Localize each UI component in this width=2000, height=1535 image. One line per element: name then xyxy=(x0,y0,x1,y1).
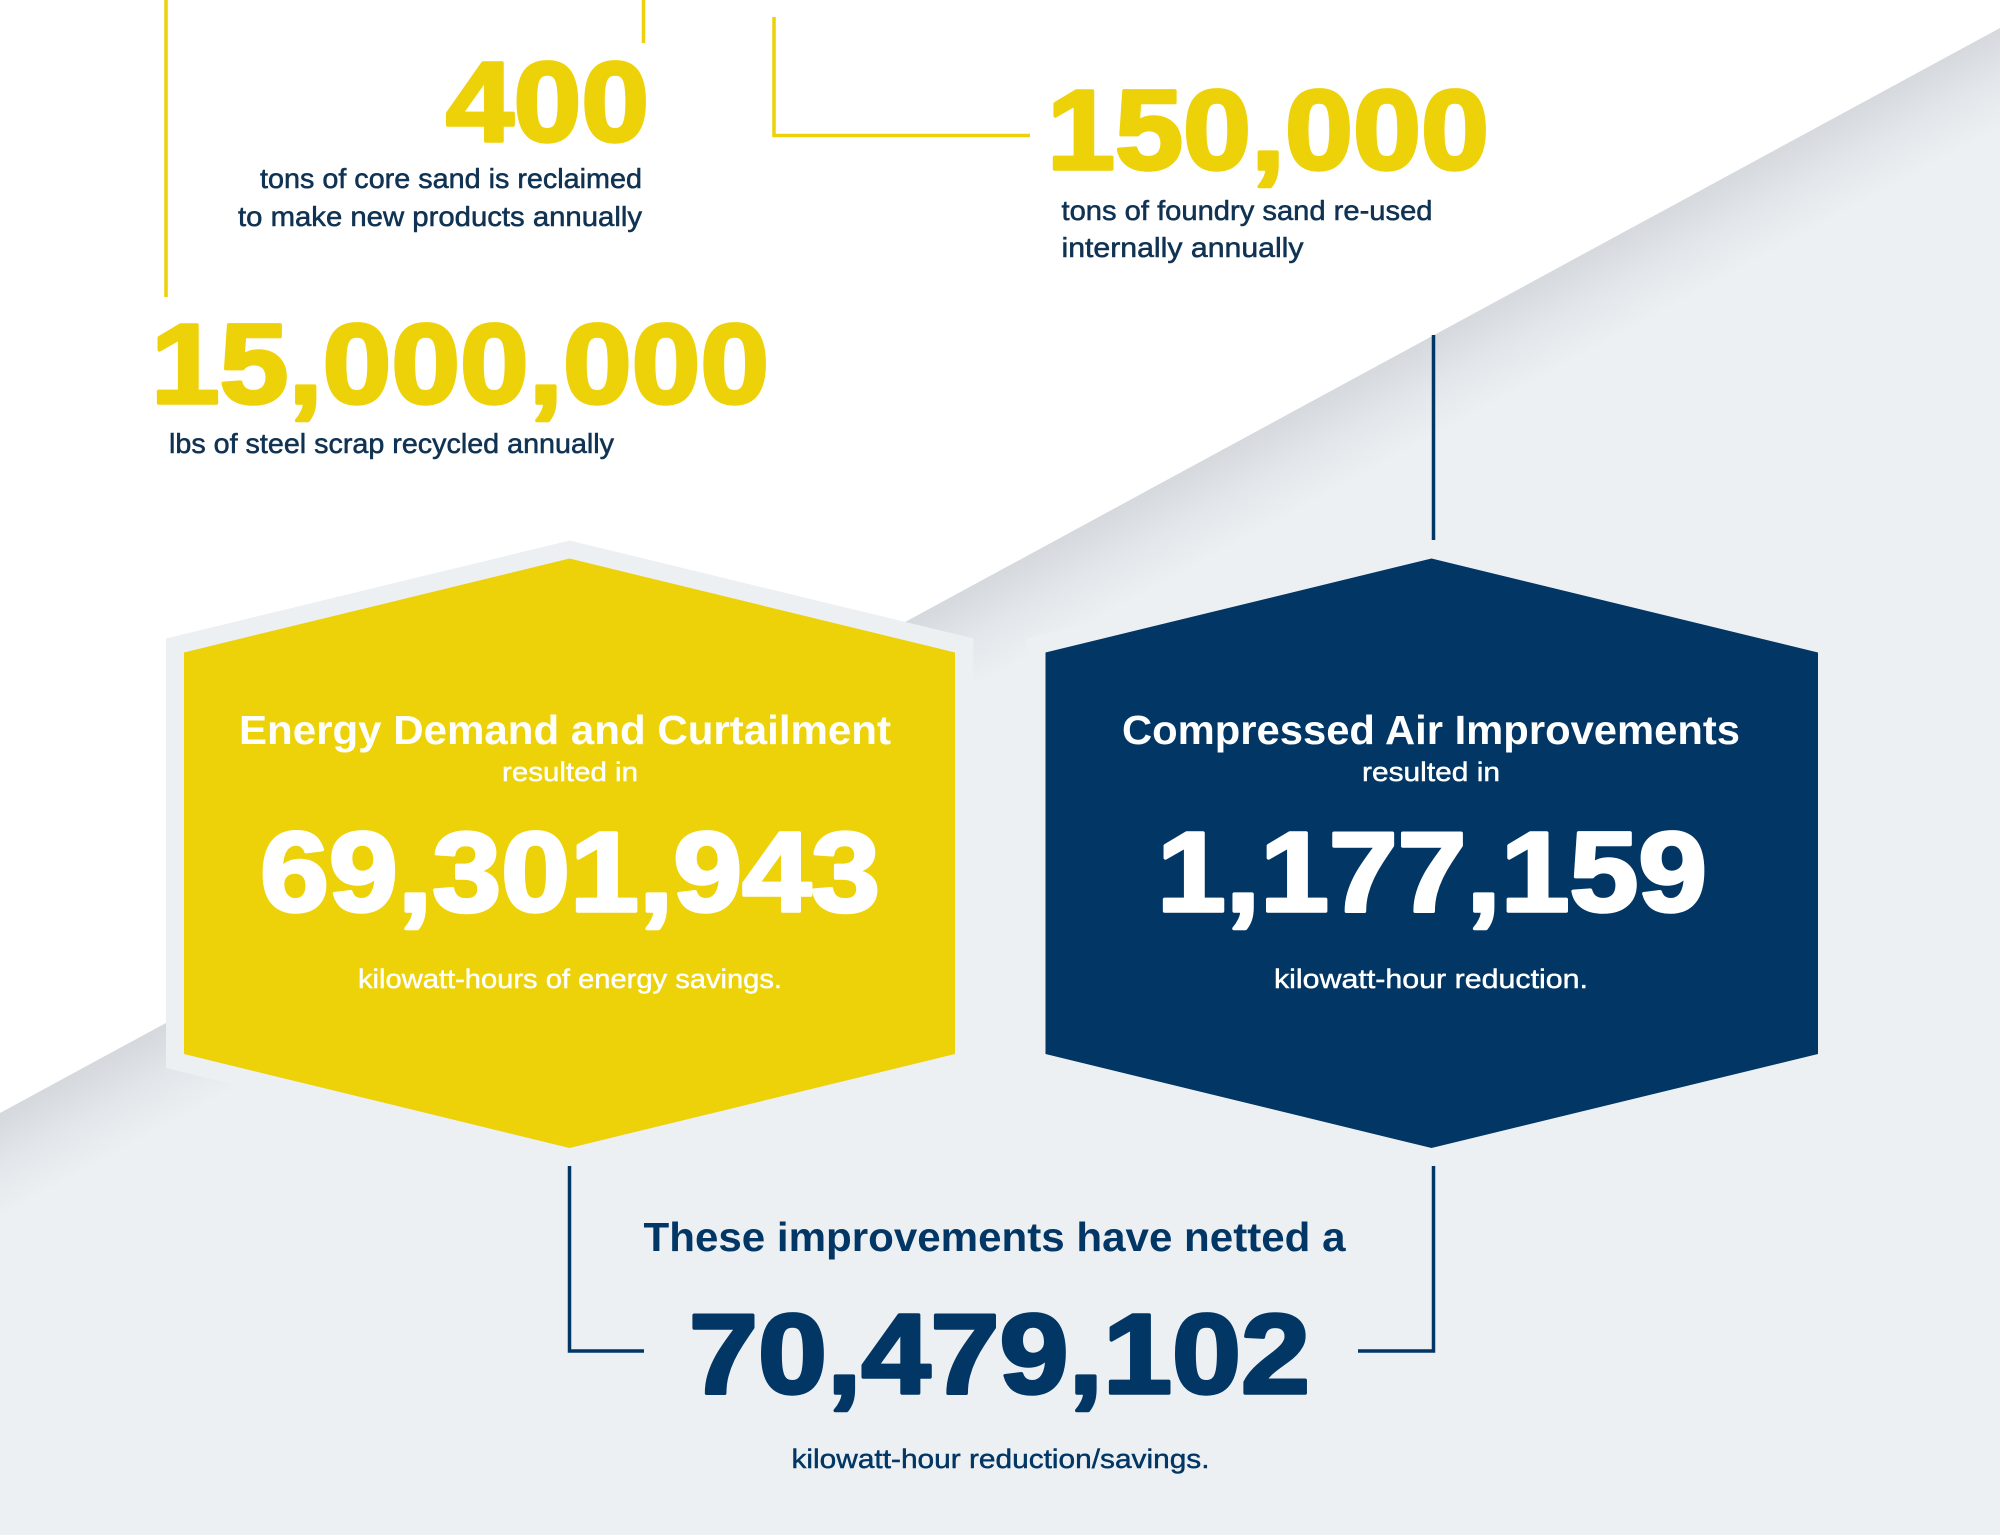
connector: navy left elbow line xyxy=(570,1166,644,1351)
connector: navy right elbow line xyxy=(1358,1166,1434,1351)
stat: 15,000,000 lbs of steel scrap xyxy=(151,301,769,459)
caption: internally annually: internally annually xyxy=(1062,232,1304,263)
connector: yellow elbow line xyxy=(774,17,1030,136)
caption: steel scrap: lbs of steel scrap recycled annually xyxy=(169,428,614,459)
panel: energy demand hexagon xyxy=(166,540,974,1166)
text: kilowatt-hour reduction/savings: kilowatt-hour reduction/savings. xyxy=(792,1444,1210,1474)
text: kilowatt-hour reduction: kilowatt-hour reduction. xyxy=(1274,964,1588,994)
caption: foundry sand: tons of foundry sand re-used xyxy=(1062,195,1432,226)
text: kilowatt-hours of energy savings: kilowatt-hours of energy savings. xyxy=(358,964,782,994)
hexagon outline: pale border xyxy=(1027,540,1836,1166)
number: 150,000: 150,000 xyxy=(1047,67,1489,193)
text: resulted in: resulted in xyxy=(502,757,638,787)
total summary block xyxy=(644,1214,1347,1474)
connector: yellow long vertical line xyxy=(164,0,168,297)
hexagon outline: pale border xyxy=(166,540,974,1166)
text: resulted in: resulted in xyxy=(1362,757,1500,787)
number: 15,000,000: 15,000,000 xyxy=(151,301,769,427)
number: 400: 400 xyxy=(446,39,649,165)
heading: These improvements have netted a: These improvements have netted a xyxy=(644,1214,1347,1260)
number: 1,177,159: 1,177,159 xyxy=(1157,809,1707,935)
connector: yellow short vertical line xyxy=(642,0,645,43)
hexagon: navy fill xyxy=(1046,558,1818,1148)
connector: navy vertical line above right hexagon xyxy=(1432,335,1435,540)
caption: core sand: tons of core sand is reclaimed xyxy=(260,163,642,194)
number: 70,479,102: 70,479,102 xyxy=(689,1291,1310,1417)
panel: compressed air hexagon xyxy=(1027,540,1836,1166)
hexagon: yellow fill xyxy=(184,558,955,1148)
heading: Energy Demand and Curtailment: Energy Demand and Curtailment xyxy=(239,707,891,753)
number: 69,301,943: 69,301,943 xyxy=(260,809,880,935)
caption: new products: to make new products annually xyxy=(238,201,642,232)
heading: Compressed Air Improvements: Compressed Air Improvements xyxy=(1122,707,1740,753)
stat: 400 tons of core sand xyxy=(238,39,649,232)
stat: 150,000 tons of foundry sand xyxy=(1047,67,1489,263)
